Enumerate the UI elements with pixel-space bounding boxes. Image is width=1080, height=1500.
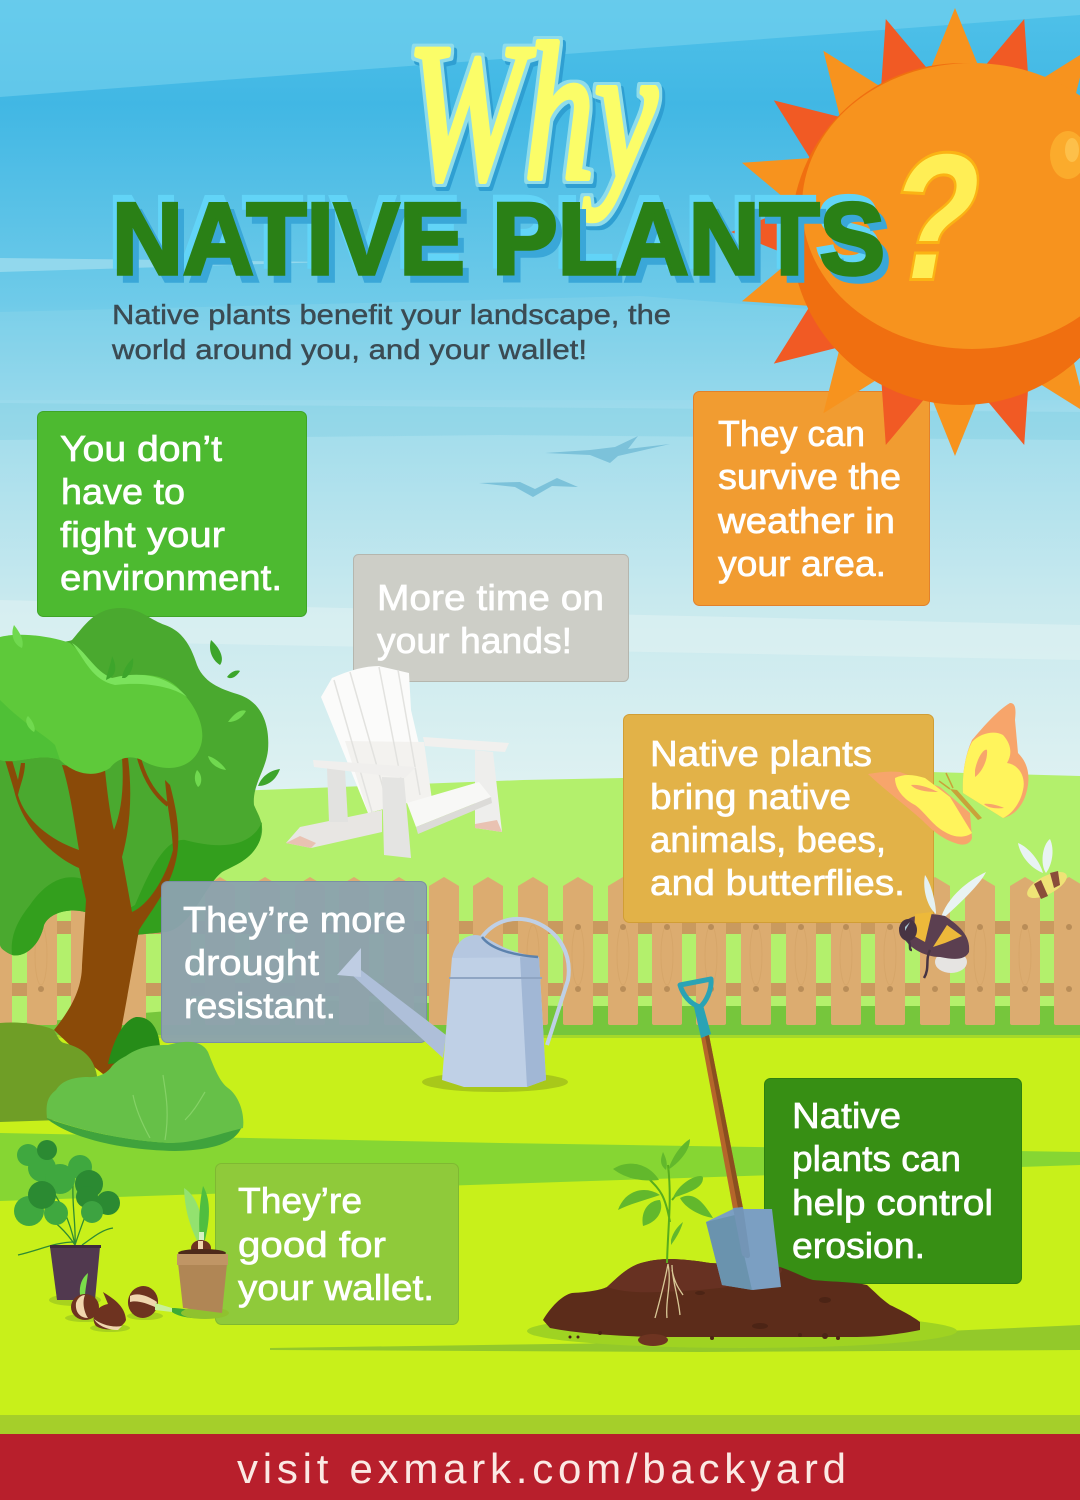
butterfly lower wing — [868, 772, 972, 845]
can top — [452, 935, 538, 958]
callout: good for your wallet: They’re — [238, 1180, 362, 1221]
tree canopy back — [0, 608, 268, 955]
tree trunk and branches — [5, 758, 178, 1080]
tree — [0, 608, 280, 1080]
soil — [178, 1249, 226, 1257]
picket fence — [0, 877, 1080, 1025]
chair right rear leg — [475, 750, 502, 832]
callout: fight your environment: fight your — [60, 514, 225, 555]
footer band: visit exmark.com/backyard — [237, 1445, 846, 1492]
tree canopy shade — [12, 822, 262, 955]
subtitle — [111, 299, 671, 365]
title: Native Plants: NATIVE PLANTS — [112, 182, 885, 296]
chair back — [321, 666, 432, 813]
callout: weather: weather in — [717, 500, 895, 541]
bee stripes — [914, 912, 932, 942]
lying bulb — [125, 1284, 161, 1320]
clods — [638, 1334, 668, 1346]
callout: more time — [354, 554, 628, 682]
plant pot — [50, 1247, 100, 1300]
callout: native animals: animals, bees, — [650, 819, 886, 860]
olive bush — [0, 1022, 100, 1122]
mound back — [543, 1259, 920, 1337]
chair foot — [286, 810, 382, 848]
ground — [0, 1035, 1080, 1435]
can body — [442, 957, 546, 1087]
tulip bulbs — [65, 1273, 216, 1332]
pot body — [177, 1254, 228, 1313]
callout: weather — [694, 392, 930, 606]
subtitle: Native plants benefit your landscape, the — [112, 299, 671, 330]
callout: erosion: Native — [792, 1095, 901, 1136]
butterfly — [868, 703, 1028, 845]
callout: drought resistant: They’re more — [183, 899, 406, 940]
small bee body — [1023, 867, 1071, 903]
callout: drought resistant — [162, 882, 426, 1042]
callout: erosion: plants can — [792, 1138, 961, 1179]
shovel — [680, 979, 781, 1290]
callout: native animals — [624, 714, 934, 922]
plant stems — [18, 1180, 113, 1255]
chair rear left leg — [327, 768, 348, 822]
callout: native animals: bring native — [650, 776, 851, 817]
callout: drought resistant: drought — [184, 942, 319, 983]
pot shadow — [181, 1307, 229, 1319]
green bush — [47, 1042, 243, 1143]
tree canopy left shade — [0, 700, 60, 761]
bee wings — [924, 875, 936, 914]
callout: erosion: erosion. — [792, 1225, 925, 1266]
shovel handle — [701, 1035, 743, 1209]
sprouting bulb — [80, 1273, 88, 1297]
callout: weather: They can — [718, 413, 865, 454]
seedling leaves — [613, 1139, 713, 1245]
chair right arm — [423, 737, 509, 752]
seedling stem — [650, 1165, 695, 1263]
small bee — [1018, 839, 1071, 903]
chair front leg — [382, 777, 411, 858]
callout: good for your wallet: good for — [238, 1224, 386, 1265]
upper right branch — [139, 758, 168, 805]
shovel grip — [680, 979, 711, 1007]
callout: native animals: Native plants — [650, 733, 872, 774]
bulb shadows — [65, 1314, 105, 1322]
bee body — [899, 914, 969, 959]
can rose — [337, 948, 361, 977]
bulb in pot — [191, 1240, 211, 1256]
watering can — [337, 919, 569, 1092]
callout: weather: your area. — [718, 543, 886, 584]
bee legs — [908, 940, 930, 978]
big bee — [899, 872, 986, 978]
callout: more time: More time on — [377, 577, 604, 618]
callout: fight your environment: environment. — [60, 557, 282, 598]
callout: native animals: and butterflies. — [650, 862, 905, 903]
mound top — [607, 1259, 782, 1292]
plant shadow — [49, 1294, 101, 1306]
canopy leaf highlights — [12, 625, 246, 787]
callout: good for your wallet — [216, 1164, 458, 1324]
can spout — [352, 967, 446, 1058]
callout: erosion — [764, 1078, 1022, 1284]
footer band — [0, 1434, 1080, 1500]
birds — [479, 436, 670, 497]
butterfly upper wing — [963, 703, 1028, 818]
callout: weather: survive the — [718, 456, 901, 497]
butterfly body — [950, 789, 982, 820]
sun — [731, 8, 1080, 456]
chair seat — [407, 782, 491, 827]
chair left arm — [313, 760, 416, 778]
bush veins — [133, 1075, 205, 1140]
plant leaves — [14, 1144, 92, 1226]
callout: drought resistant: resistant. — [184, 985, 336, 1026]
callout: erosion: help control — [792, 1182, 993, 1223]
callout: more time: your hands! — [377, 620, 572, 661]
tree canopy highlight — [72, 643, 187, 697]
can shadow — [422, 1072, 568, 1092]
subtitle: world around you, and your wallet! — [111, 334, 587, 365]
soil mound — [527, 1259, 957, 1348]
loose leaves — [106, 640, 280, 786]
title: Why: Why — [407, 4, 658, 221]
title: question mark: ? — [875, 118, 997, 316]
seedling — [613, 1139, 713, 1318]
ground shading bands — [0, 1035, 1080, 1434]
callout: fight your environment: You don’t — [60, 428, 222, 469]
tree canopy front — [0, 635, 202, 774]
sky background — [0, 0, 1080, 800]
bee tail — [935, 951, 967, 973]
green bush rim — [46, 1118, 243, 1151]
trowel — [155, 1303, 172, 1312]
bee head — [899, 919, 917, 941]
bushes — [0, 1017, 243, 1151]
terracotta pot with sprout — [177, 1186, 229, 1319]
small bee wings — [1018, 843, 1043, 873]
seedling roots — [655, 1264, 683, 1318]
grass hill — [0, 772, 1080, 1040]
strawberry plant in pot — [14, 1140, 120, 1306]
shovel shaft collar — [694, 1005, 711, 1038]
sprout — [184, 1188, 203, 1245]
mound shadow — [527, 1314, 957, 1348]
callout: fight your environment — [38, 412, 306, 616]
shovel blade — [706, 1209, 781, 1290]
dark bush — [108, 1017, 160, 1064]
split bulb — [94, 1292, 126, 1329]
can handle — [482, 919, 569, 1045]
distant grass strip — [0, 1000, 1080, 1040]
adirondack chair — [286, 666, 509, 858]
callout: good for your wallet: your wallet. — [238, 1267, 434, 1308]
callout: fight your environment: have to — [61, 471, 185, 512]
